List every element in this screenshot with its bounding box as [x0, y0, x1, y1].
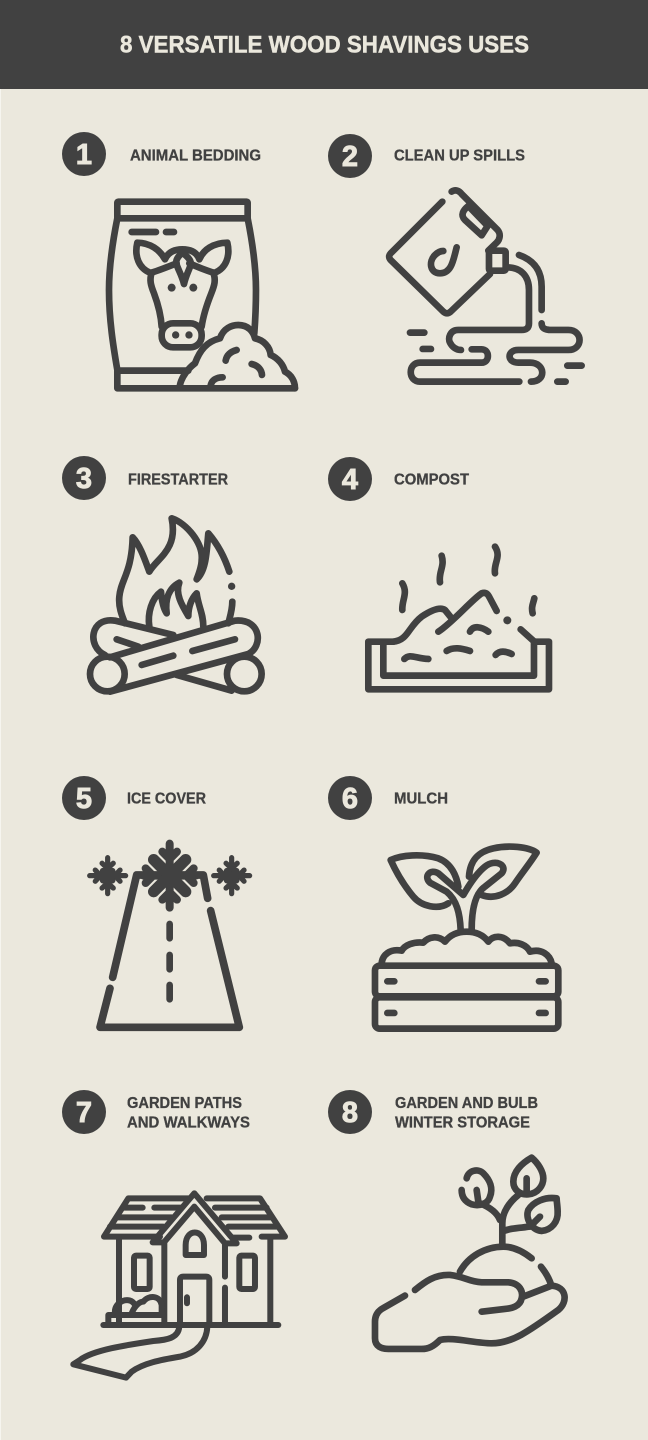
number badge 2: 2: [342, 141, 358, 173]
label: garden paths and walkways: AND WALKWAYS: [127, 1114, 250, 1132]
number badge 8: 8: [342, 1097, 358, 1129]
panel: firestarter: [62, 456, 262, 692]
icon: jug pouring a spill: [389, 190, 582, 382]
label: animal bedding: ANIMAL BEDDING: [130, 148, 261, 164]
icon: seedling in crate: [375, 847, 558, 1029]
panel: garden and bulb winter storage: [328, 1090, 565, 1349]
panel: animal bedding: [62, 132, 295, 388]
number badge 2: [328, 134, 372, 178]
header banner: [0, 0, 648, 89]
icon: compost heap in tray: [368, 547, 549, 689]
panel: clean up spills: [328, 134, 582, 382]
number badge 7: 7: [76, 1097, 92, 1129]
panel: mulch: [328, 776, 558, 1029]
label: compost: COMPOST: [394, 472, 469, 488]
panel: compost: [328, 457, 549, 689]
label: garden and bulb winter storage: GARDEN AND BULB: [395, 1095, 538, 1112]
panel: garden paths and walkways: [62, 1090, 285, 1378]
label: mulch: MULCH: [394, 790, 448, 808]
icon: hand holding sprout: [375, 1158, 565, 1349]
number badge 6: 6: [342, 783, 358, 815]
number badge 4: 4: [342, 464, 358, 496]
icon: snowy road: [90, 844, 250, 1027]
label: ice cover: ICE COVER: [127, 790, 206, 808]
number badge 5: 5: [76, 783, 92, 815]
number badge 4: [328, 457, 372, 501]
label: firestarter: FIRESTARTER: [128, 472, 228, 488]
number badge 1: [62, 132, 106, 176]
number badge 6: [328, 776, 372, 820]
label: garden and bulb winter storage: WINTER STORAGE: [395, 1114, 530, 1132]
number badge 7: [62, 1090, 106, 1134]
title: 8 VERSATILE WOOD SHAVINGS USES: [120, 32, 529, 58]
icon: bag of bedding with cow: [109, 202, 295, 388]
label: clean up spills: CLEAN UP SPILLS: [394, 148, 525, 164]
label: garden paths and walkways: GARDEN PATHS: [127, 1095, 242, 1112]
number badge 3: 3: [76, 463, 92, 495]
icon: house with path: [73, 1193, 285, 1378]
panel: ice cover: [62, 776, 250, 1027]
number badge 3: [62, 456, 106, 500]
icon: campfire: [90, 518, 262, 692]
number badge 8: [328, 1090, 372, 1134]
number badge 5: [62, 776, 106, 820]
number badge 1: 1: [76, 139, 92, 171]
